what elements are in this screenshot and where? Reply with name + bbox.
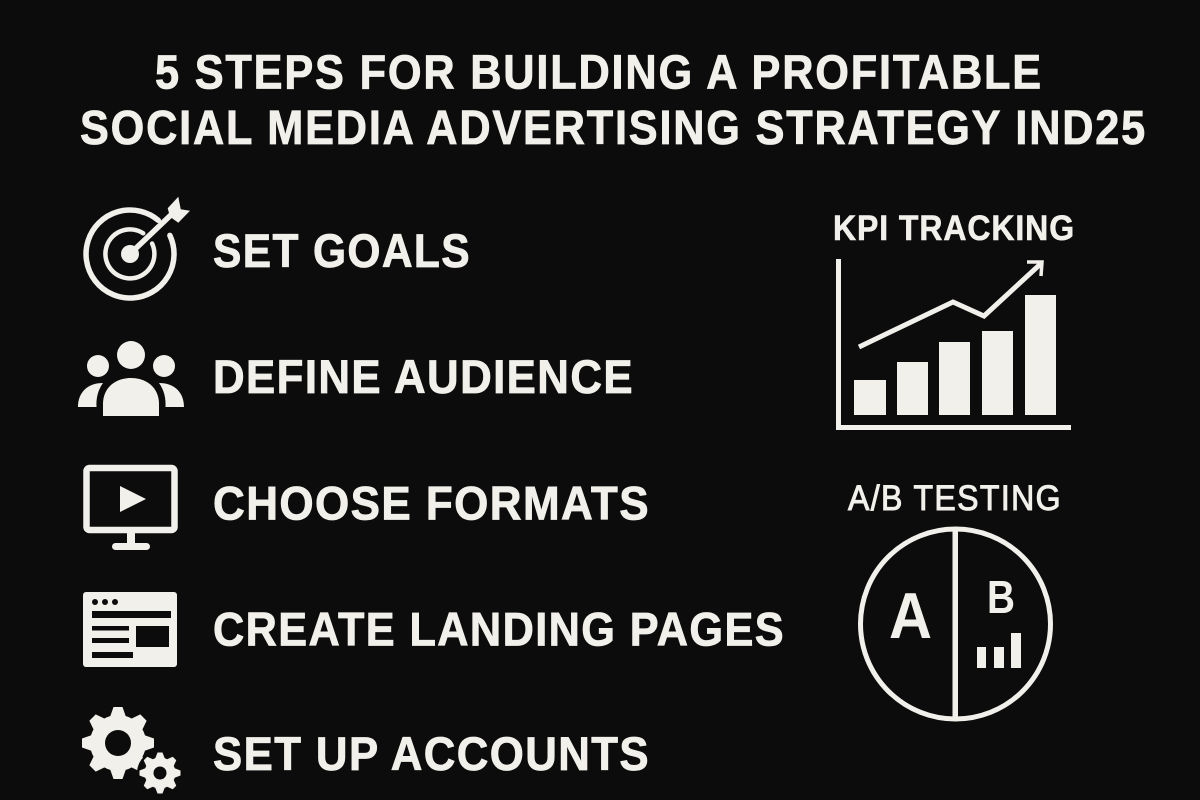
diagram: split circle bbox=[860, 527, 1050, 721]
icon: target with arrow bbox=[86, 197, 190, 298]
variant a: A bbox=[889, 579, 932, 652]
panel: a/b testing bbox=[848, 479, 1062, 721]
label: set goals: SET GOALS bbox=[213, 224, 471, 277]
title: 5 STEPS FOR BUILDING A PROFITABLE bbox=[155, 46, 1043, 100]
title bbox=[80, 46, 1147, 155]
icon: web page layout bbox=[83, 592, 177, 667]
step 1: set goals bbox=[86, 197, 471, 298]
step 5: set up accounts bbox=[82, 707, 650, 796]
step 3: choose formats bbox=[86, 468, 650, 550]
panel: kpi tracking bbox=[833, 209, 1075, 428]
label: create landing pages: CREATE LANDING PAGES bbox=[213, 602, 785, 656]
label: choose formats: CHOOSE FORMATS bbox=[213, 476, 650, 530]
label: define audience: DEFINE AUDIENCE bbox=[213, 350, 634, 403]
icon: monitor with play button bbox=[86, 468, 174, 550]
chart: rising bars with trend arrow bbox=[838, 259, 1071, 428]
label: set up accounts: SET UP ACCOUNTS bbox=[213, 727, 650, 780]
icon: gears bbox=[82, 707, 183, 796]
variant b with mini bars bbox=[977, 571, 1021, 668]
heading: kpi tracking: KPI TRACKING bbox=[833, 209, 1075, 248]
step 4: create landing pages bbox=[83, 592, 785, 667]
step 2: define audience bbox=[78, 341, 634, 416]
variant b with mini bars: B bbox=[987, 571, 1015, 623]
icon: people bbox=[78, 341, 184, 416]
heading: a/b testing: A/B TESTING bbox=[848, 479, 1062, 518]
